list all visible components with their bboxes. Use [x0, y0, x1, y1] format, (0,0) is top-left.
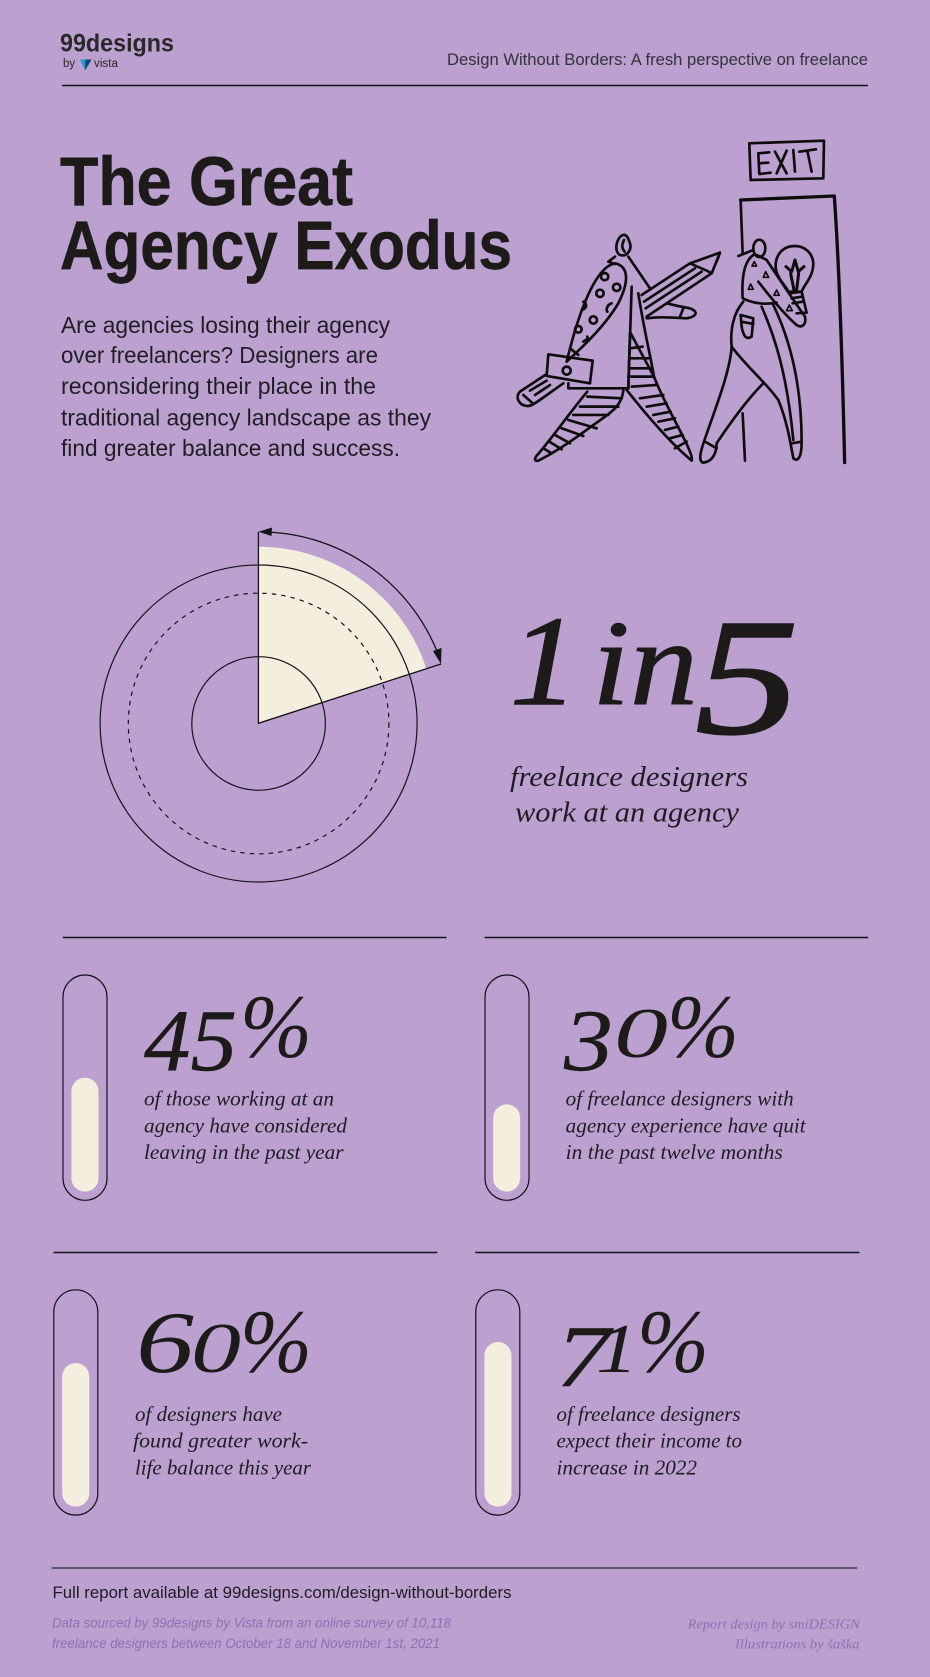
credits: Report design by smiDESIGN [687, 1617, 860, 1632]
figure: % [667, 978, 739, 1077]
credits [687, 1617, 860, 1652]
header tagline: Design Without Borders: A fresh perspective on freelance [447, 51, 868, 69]
caption: leaving in the past year [144, 1140, 344, 1164]
gauge [54, 1290, 98, 1515]
icon: person carrying light bulb [700, 240, 813, 463]
caption [133, 1402, 312, 1479]
report link: Full report available at 99designs.com/design-without-borders [52, 1584, 512, 1602]
figure: 6 [136, 1295, 194, 1392]
figure [144, 978, 312, 1090]
figure: % [240, 1293, 312, 1392]
concentric circles [100, 565, 417, 882]
icon: exit sign [749, 141, 824, 180]
caption: agency have considered [144, 1113, 348, 1137]
data source note [52, 1614, 451, 1651]
panel: 60% [54, 1252, 437, 1515]
intro paragraph: reconsidering their place in the [61, 373, 376, 399]
caption: expect their income to [556, 1429, 742, 1453]
figure: 45 [144, 993, 237, 1090]
footer [51, 1568, 860, 1652]
panel: 45% [63, 938, 447, 1200]
panel: 30% [484, 938, 868, 1200]
gauge [485, 975, 529, 1200]
figure [136, 1293, 312, 1392]
caption: in the past twelve months [566, 1140, 783, 1164]
gauge [476, 1290, 520, 1515]
figure: 7 [556, 1309, 615, 1406]
intro paragraph: over freelancers? Designers are [61, 342, 378, 368]
big number: 1 [510, 590, 578, 732]
intro paragraph [61, 312, 431, 461]
caption: life balance this year [135, 1455, 312, 1479]
logo: 99designs by vista: 99designs [60, 30, 174, 58]
intro paragraph: traditional agency landscape as they [61, 404, 431, 430]
figure: 0 [191, 1310, 241, 1388]
chart: 1 in 5 radial diagram [100, 528, 442, 882]
caption: of freelance designers with [566, 1087, 794, 1111]
logo: 99designs by vista [60, 30, 174, 70]
figure [563, 978, 739, 1090]
logo: 99designs by vista: by [63, 58, 75, 70]
intro paragraph: find greater balance and success. [61, 435, 400, 461]
title [60, 143, 512, 284]
caption: of those working at an [144, 1087, 334, 1111]
figure: % [240, 978, 312, 1077]
credits: Illustrations by šaška [734, 1637, 860, 1652]
figure [556, 1293, 709, 1406]
caption: of designers have [135, 1402, 282, 1426]
big number: 5 [695, 585, 799, 769]
data source note: Data sourced by 99designs by Vista from an online survey of 10,118 [52, 1614, 451, 1630]
figure: 1 [596, 1311, 638, 1388]
title: The Great [60, 143, 353, 220]
data source note: freelance designers between October 18 and November 1st, 2021 [52, 1635, 440, 1651]
header [60, 30, 868, 70]
icon: door [741, 196, 845, 463]
caption: of freelance designers [556, 1402, 740, 1426]
icon: walking person with pencil [518, 235, 720, 461]
figure: 0 [614, 995, 668, 1073]
wedge outline and arc arrow [258, 532, 441, 723]
title: Agency Exodus [60, 207, 512, 284]
caption [566, 1087, 807, 1164]
caption [556, 1402, 742, 1479]
intro paragraph: Are agencies losing their agency [61, 312, 390, 338]
stat: 1 in 5 [510, 585, 799, 828]
logo: 99designs by vista: vista [94, 58, 119, 70]
figure: % [637, 1293, 709, 1392]
arrowheads [258, 528, 442, 664]
big number: in [592, 596, 698, 731]
caption [144, 1087, 348, 1164]
caption: increase in 2022 [556, 1455, 697, 1479]
big number [510, 585, 799, 769]
cream wedge (72 degrees) [258, 547, 426, 723]
caption: found greater work- [133, 1429, 308, 1453]
illustration: two designers walking to the exit door [518, 141, 845, 463]
panel: 71% [475, 1252, 860, 1515]
caption: freelance designers [510, 762, 748, 793]
gauge [63, 975, 107, 1200]
figure: 3 [563, 993, 613, 1090]
caption: work at an agency [515, 798, 740, 828]
caption: agency experience have quit [566, 1113, 807, 1137]
caption [510, 762, 748, 828]
